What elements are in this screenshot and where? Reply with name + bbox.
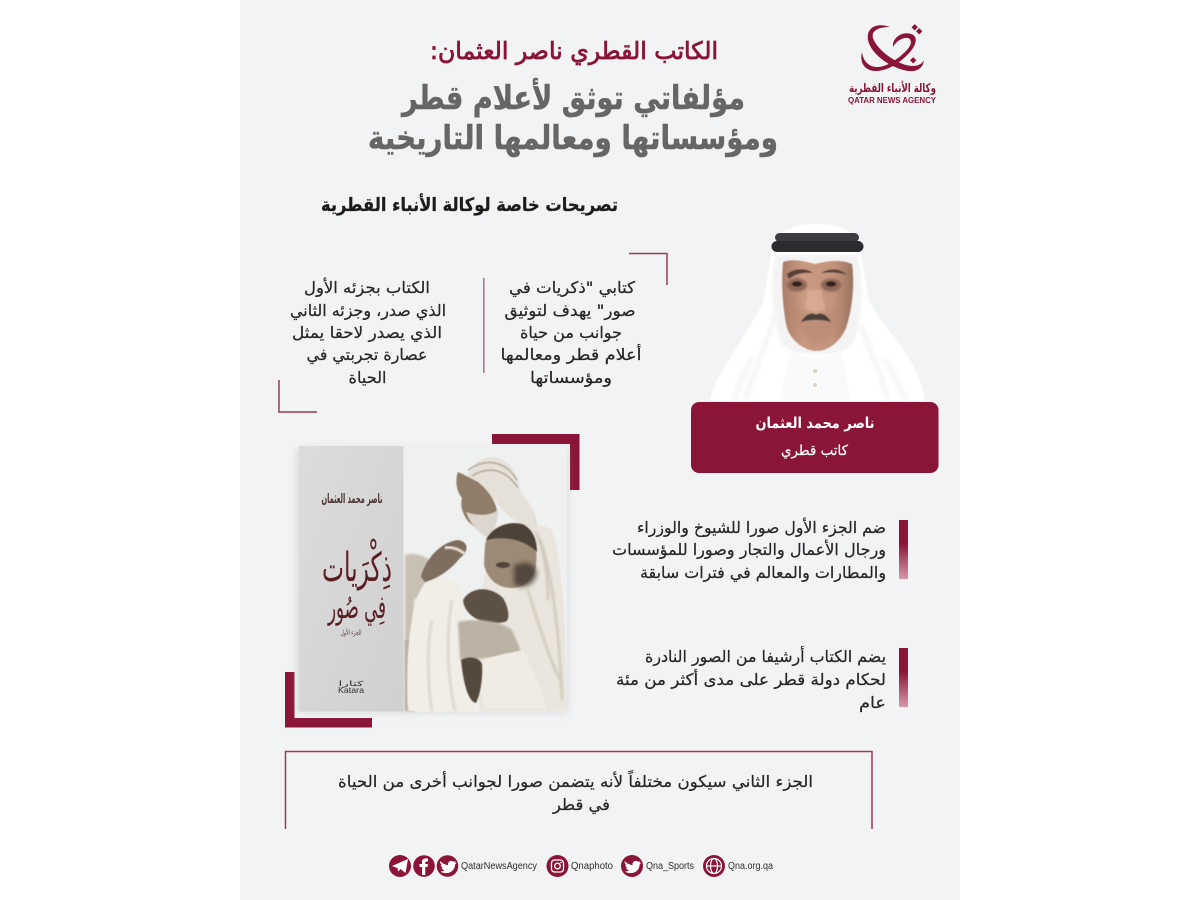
logo: English wordmark: QATAR NEWS AGENCY [848,96,937,105]
book cover: author: ناصر محمد العثمان [322,492,382,507]
book cover: Katara [338,686,365,695]
name card [691,402,938,473]
portrait: Nasser Al-Othman [710,224,925,401]
quote: left column: عصارة تجربتي في [306,345,428,365]
quote: left column: الذي يصدر لاحقا يمثل [292,323,442,343]
divider: between quotes [483,278,485,373]
point one text: ورجال الأعمال والتجار وصورا للمؤسسات [612,539,886,560]
title block [368,37,778,158]
quote: middle column: صور" يهدف لتوثيق [504,301,636,321]
icon: facebook [413,855,435,877]
handle: Qnaphoto: Qnaphoto [571,861,613,872]
point one text: والمطارات والمعالم في فترات سابقة [640,563,886,583]
quote: middle column [500,278,642,388]
logo: Qatar News Agency [848,24,937,105]
point one text [612,517,886,583]
quote: left column: الحياة [348,368,386,387]
quote: left column: الذي صدر، وجزئه الثاني [290,301,446,321]
book image frame [285,434,580,728]
icon: twitter sports [621,855,643,877]
book cover [296,446,568,713]
social media footer [389,855,773,877]
book cover: book title: ذِكْرَيات [322,539,392,591]
icon: globe [703,855,725,877]
book cover: publisher: كتارا [338,680,365,688]
quote: middle column: جوانب من حياة [520,323,622,343]
subheading: تصريحات خاصة لوكالة الأنباء القطرية [321,193,618,216]
book cover: photograph [405,457,567,711]
title: main line two: ومؤسساتها ومعالمها التاريخية [368,118,778,158]
point two text: لحكام دولة قطر على مدى أكثر من مئة [616,669,886,690]
bottom note box [286,752,872,829]
page background panel [240,0,960,900]
point two text: يضم الكتاب أرشيفا من الصور النادرة [645,646,886,667]
quote: left column: الكتاب بجزئه الأول [304,277,430,298]
point two text [616,646,886,712]
bracket: left quote bottom left [279,380,317,412]
icon: telegram [389,855,411,877]
title: kicker line: الكاتب القطري ناصر العثمان: [430,37,718,65]
quote: left column [290,277,446,387]
name card: name: ناصر محمد العثمان [756,414,874,432]
book cover: volume: الجزء الأول [340,628,362,637]
icon: twitter [437,855,458,877]
book cover: title panel [299,446,404,712]
bottom note box: في قطر [552,795,610,815]
quote: middle column: ومؤسساتها [530,368,612,388]
quote: middle column: أعلام قطر ومعالمها [500,344,642,365]
point one accent bar [899,520,908,579]
bottom note text: الجزء الثاني سيكون مختلفاً لأنه يتضمن صورا لجوانب أخرى من الحياة [338,769,813,792]
icon: instagram [546,855,568,877]
book cover: فِي صُور [327,588,386,626]
quote: middle column: كتابي "ذكريات في [509,278,635,298]
point one text: ضم الجزء الأول صورا للشيوخ والوزراء [637,517,886,538]
logo: Arabic wordmark: وكالة الأنباء القطرية [849,80,936,96]
handle: Qna.org.qa: Qna.org.qa [728,861,773,872]
frame: top right corner [492,434,580,490]
handle: QatarNewsAgency: QatarNewsAgency [461,861,537,872]
bracket: middle quote top right [629,254,667,285]
handle: Qna_Sports: Qna_Sports [646,861,694,872]
point two text: عام [859,693,886,712]
frame: bottom left corner [285,672,372,728]
point two accent bar [899,648,908,707]
title: main line one: مؤلفاتي توثق لأعلام قطر [400,77,745,118]
name card: role: كاتب قطري [781,443,848,459]
